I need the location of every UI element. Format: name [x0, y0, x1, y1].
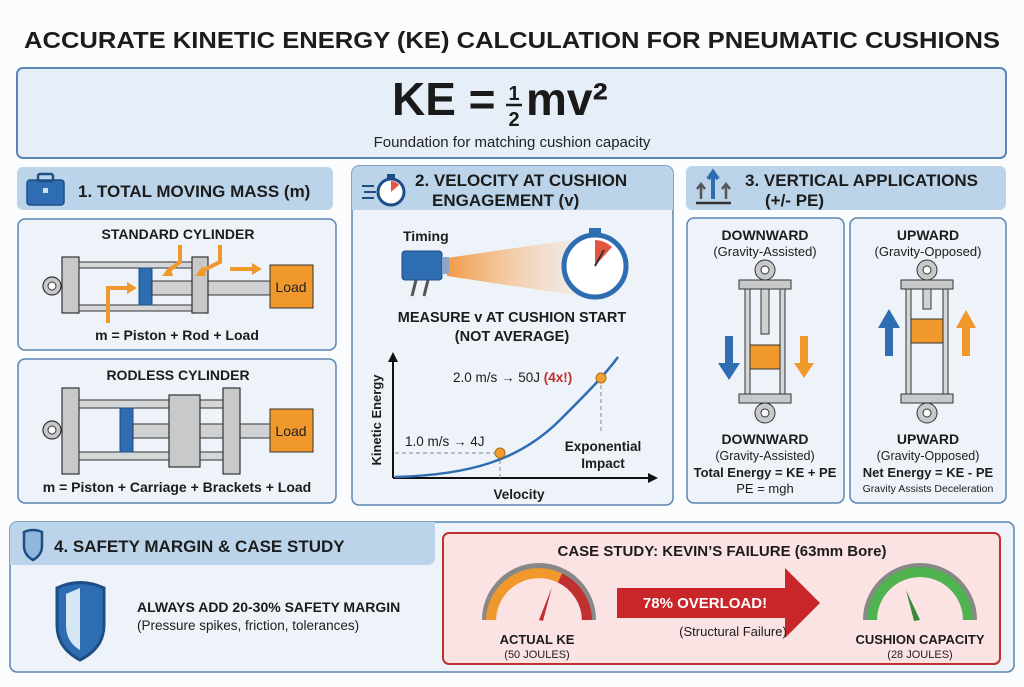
- chart: kinetic energy vs velocity: 2.0 m/s → 50J (4x!): [453, 370, 572, 385]
- formula banner: [17, 68, 1006, 158]
- heading 3: (+/- PE): [765, 191, 824, 210]
- arrow: overload: (Structural Failure): [679, 624, 787, 639]
- sub-panel: downward: DOWNWARD: [721, 227, 809, 243]
- heading 2: ENGAGEMENT (v): [432, 191, 579, 210]
- panel 1: total moving mass: [17, 167, 336, 503]
- sub-panel: upward: (Gravity-Opposed): [875, 244, 981, 259]
- icon: briefcase: [27, 174, 64, 205]
- subtitle: Foundation for matching cushion capacity: [374, 134, 651, 151]
- sub-panel: downward: [687, 218, 844, 503]
- chart: kinetic energy vs velocity: 1.0 m/s → 4J: [405, 434, 485, 449]
- sub-panel: upward: Net Energy = KE - PE: [863, 465, 994, 480]
- sub-panel: downward: Total Energy = KE + PE: [694, 465, 837, 480]
- text: measure v: MEASURE v AT CUSHION START: [398, 310, 626, 326]
- icon: stopwatch: [362, 174, 404, 205]
- heading 4: 4. SAFETY MARGIN & CASE STUDY: [54, 537, 345, 556]
- chart: kinetic energy vs velocity: Impact: [581, 456, 625, 471]
- sub-panel: downward: PE = mgh: [736, 481, 794, 496]
- gauge: cushion capacity: CUSHION CAPACITY: [855, 632, 985, 647]
- sub-panel: rodless cylinder: [18, 359, 336, 503]
- sub-panel: standard cylinder: [18, 219, 336, 350]
- sub-panel: rodless cylinder: m = Piston + Carriage + Brackets + Load: [43, 479, 311, 495]
- formula: KE =: [392, 73, 496, 125]
- sub-panel: rodless cylinder: RODLESS CYLINDER: [106, 367, 250, 383]
- title: ACCURATE KINETIC ENERGY (KE) CALCULATION FOR PNEUMATIC CUSHIONS: [24, 27, 1000, 53]
- gauge: actual KE: ACTUAL KE: [500, 632, 575, 647]
- sub-panel: standard cylinder: STANDARD CYLINDER: [102, 226, 254, 242]
- arrow: overload: [617, 568, 820, 639]
- panel 4: safety margin and case study: [10, 522, 1014, 672]
- formula: 2: [508, 109, 520, 131]
- arrow: overload: 78% OVERLOAD!: [643, 595, 767, 612]
- sub-panel: downward: (Gravity-Assisted): [715, 449, 815, 463]
- gauge: actual KE: (50 JOULES): [504, 649, 570, 661]
- text: safety margin: (Pressure spikes, friction, tolerances): [137, 618, 359, 633]
- timing sensor and stopwatch illustration: Timing: [403, 228, 449, 244]
- sub-panel: upward: [850, 218, 1006, 503]
- chart: kinetic energy vs velocity: Exponential: [565, 439, 641, 454]
- formula: mv²: [526, 73, 608, 125]
- sub-panel: downward: DOWNWARD: [721, 431, 809, 447]
- icon: up arrows: [696, 172, 731, 203]
- sub-panel: upward: Gravity Assists Deceleration: [863, 483, 994, 495]
- formula: [392, 73, 608, 131]
- formula: 1: [508, 83, 520, 105]
- panel 2: velocity: [352, 166, 673, 505]
- case study box: CASE STUDY: KEVIN’S FAILURE (63mm Bore): [558, 543, 886, 560]
- heading 3: 3. VERTICAL APPLICATIONS: [745, 171, 978, 190]
- case study box: [443, 533, 1000, 664]
- sub-panel: upward: UPWARD: [897, 431, 959, 447]
- sub-panel: rodless cylinder: Load: [275, 423, 307, 439]
- chart: kinetic energy vs velocity: Velocity: [493, 487, 545, 502]
- sub-panel: downward: (Gravity-Assisted): [713, 244, 817, 259]
- gauge: cushion capacity: (28 JOULES): [887, 649, 953, 661]
- gauge: actual KE: [489, 570, 589, 661]
- chart: kinetic energy vs velocity: [369, 352, 658, 502]
- sub-panel: standard cylinder: m = Piston + Rod + Load: [95, 327, 259, 343]
- icon: small shield: [24, 530, 42, 560]
- heading 1: 1. TOTAL MOVING MASS (m): [78, 182, 310, 201]
- sub-panel: upward: UPWARD: [897, 227, 959, 243]
- sub-panel: upward: (Gravity-Opposed): [877, 449, 979, 463]
- icon: large shield: [57, 582, 104, 660]
- sub-panel: standard cylinder: Load: [275, 279, 307, 295]
- chart: kinetic energy vs velocity: Kinetic Energy: [369, 374, 384, 466]
- gauge: cushion capacity: [855, 570, 985, 661]
- text: safety margin: ALWAYS ADD 20-30% SAFETY MARGIN: [137, 599, 400, 615]
- heading 2: 2. VELOCITY AT CUSHION: [415, 171, 627, 190]
- timing sensor and stopwatch illustration: [402, 228, 626, 297]
- panel 3: vertical applications: [686, 166, 1006, 503]
- text: measure v: (NOT AVERAGE): [455, 329, 569, 345]
